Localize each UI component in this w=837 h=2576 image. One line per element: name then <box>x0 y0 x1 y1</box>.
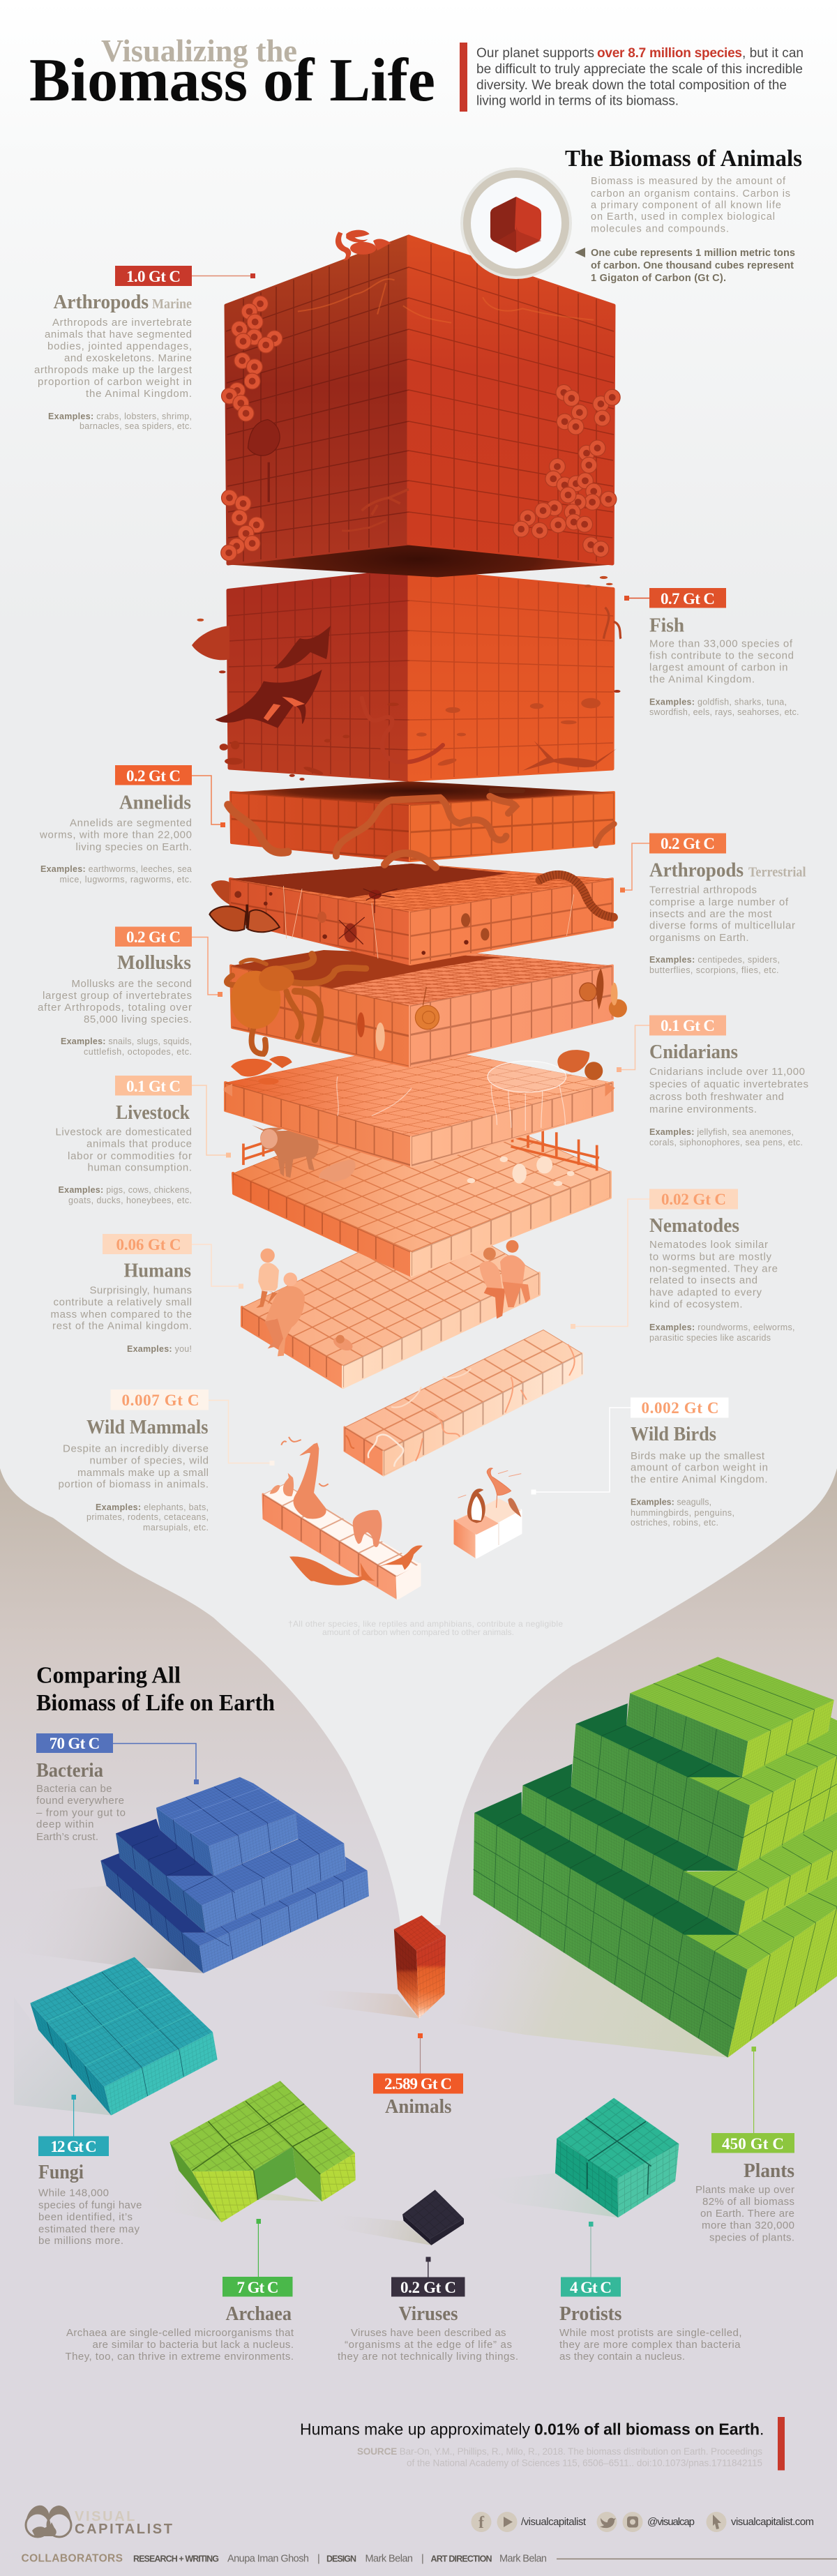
label: humans: contribute a relatively small <box>53 1296 192 1309</box>
label: arthropods marine: 1.0 Gt C <box>126 268 181 285</box>
label: arthropods terrestrial <box>620 833 806 975</box>
label: arthropods marine: animals that have segmented <box>45 329 192 340</box>
label: fish <box>624 588 799 717</box>
label: arthropods marine: arthropods make up the largest <box>34 364 193 376</box>
label: nematodes: 0.02 Gt C <box>661 1191 726 1208</box>
label: wild birds: ostriches, robins, etc. <box>631 1518 718 1528</box>
credits line: Mark Belan <box>499 2553 547 2564</box>
icon: farm animals <box>243 1125 599 1186</box>
label: arthropods marine: Arthropods are invertebrate <box>52 317 192 329</box>
label: annelids: Examples: earthworms, leeches, sea <box>40 864 192 874</box>
title: Biomass of Life <box>29 47 435 114</box>
stack: fish cube <box>192 570 621 781</box>
credits line: Anupa Iman Ghosh <box>227 2553 309 2564</box>
label: nematodes: Nematodes <box>649 1214 739 1237</box>
label: bacteria: found everywhere <box>36 1795 124 1807</box>
label: fungi: species of fungi have <box>38 2199 142 2211</box>
icon: people <box>256 1240 530 1356</box>
label: fungi: Fungi <box>38 2161 84 2183</box>
stack: wild mammals blocks <box>263 1437 423 1599</box>
callout: one cube scale <box>575 248 795 284</box>
label: arthropods terrestrial: 0.2 Gt C <box>661 835 715 852</box>
social links: @visualcap <box>647 2516 695 2528</box>
label: fungi: been identified, it’s <box>38 2211 133 2223</box>
label: fungi <box>38 2095 142 2247</box>
blocks: protists <box>555 2098 679 2217</box>
label: fish: the Animal Kingdom. <box>649 674 755 685</box>
label: plants: Plants <box>744 2160 794 2182</box>
label: humans: Surprisingly, humans <box>89 1285 192 1296</box>
credits line: | <box>421 2553 424 2564</box>
label: fungi: estimated there may <box>38 2224 140 2235</box>
label: plants: 450 Gt C <box>722 2135 784 2153</box>
label: wild birds: hummingbirds, penguins, <box>631 1508 734 1518</box>
label: archaea: Archaea <box>226 2303 292 2325</box>
label: cnidarians: Cnidarians <box>649 1041 738 1063</box>
callout: humans share of biomass: 0.01% of all biomass on Earth <box>534 2420 760 2439</box>
label: nematodes: related to insects and <box>649 1274 757 1286</box>
plants second tier <box>571 1703 837 1871</box>
label: arthropods terrestrial: comprise a large number of <box>649 896 789 908</box>
label: cnidarians: Examples: jellyfish, sea anemones, <box>649 1127 794 1137</box>
blocks: animals pillar <box>394 1915 446 2019</box>
label: arthropods terrestrial: Terrestrial <box>748 865 806 880</box>
label: fungi: be millions more. <box>38 2235 123 2247</box>
label: livestock: goats, ducks, honeybees, etc. <box>68 1196 192 1205</box>
text block: biomass definition: on Earth, used in complex biological <box>591 211 775 223</box>
label: archaea: are similar to bacteria but lack a nucleus. <box>92 2339 294 2351</box>
label: fish: fish contribute to the second <box>649 650 794 661</box>
label: viruses <box>338 2257 518 2363</box>
footnote: amount of carbon when compared to other animals. <box>322 1627 514 1637</box>
label: arthropods marine: Marine <box>152 296 192 312</box>
plants third tier <box>522 1764 837 1935</box>
label: bacteria: Bacteria <box>36 1759 103 1782</box>
callout: one cube scale: of carbon. One thousand cubes represent <box>591 260 794 271</box>
icon: worms <box>228 790 614 868</box>
credits line: ART DIRECTION <box>431 2554 492 2564</box>
stack: humans blocks <box>242 1214 539 1387</box>
label: archaea: 7 Gt C <box>237 2279 279 2296</box>
label: wild mammals: 0.007 Gt C <box>121 1392 199 1409</box>
icon: insects <box>209 875 614 958</box>
label: viruses: Viruses have been described as <box>351 2327 506 2339</box>
callout: humans share of biomass: Humans make up approximately <box>300 2420 530 2439</box>
label: arthropods marine: Arthropods <box>53 291 149 313</box>
label: bacteria: Bacteria can be <box>36 1783 112 1795</box>
label: mollusks: largest group of invertebrates <box>43 990 192 1002</box>
intro text: over 8.7 million species <box>597 46 742 61</box>
fungi block <box>30 1957 218 2116</box>
social links <box>472 2512 814 2532</box>
label: bacteria: – from your gut to <box>36 1807 126 1819</box>
label: fish: More than 33,000 species of <box>649 638 793 650</box>
icon: octopus and snails <box>227 954 627 1054</box>
label: annelids: Annelids are segmented <box>70 818 192 829</box>
label: humans: 0.06 Gt C <box>116 1236 181 1253</box>
label: plants: on Earth. There are <box>700 2208 794 2220</box>
callout: one cube scale: 1 Gigaton of Carbon (Gt C). <box>591 273 726 284</box>
label: arthropods marine: proportion of carbon weight in <box>38 376 192 388</box>
heading: comparing all biomass <box>36 1663 275 1716</box>
credits line: | <box>317 2553 320 2564</box>
credits line <box>21 2553 837 2564</box>
label: arthropods terrestrial: diverse forms of multicellular <box>649 919 795 932</box>
blocks: viruses <box>402 2190 464 2245</box>
intro text: Our planet supports <box>476 46 594 61</box>
label: bacteria <box>36 1733 199 1843</box>
icon: instagram <box>622 2512 643 2532</box>
label: protists: they are more complex than bacteria <box>559 2339 741 2351</box>
label: humans: mass when compared to the <box>50 1309 192 1320</box>
intro text <box>460 43 804 112</box>
label: livestock: 0.1 Gt C <box>126 1078 181 1095</box>
label: archaea: Archaea are single-celled microorganisms that <box>66 2327 294 2339</box>
label: animals: Animals <box>385 2095 452 2118</box>
label: mollusks: 0.2 Gt C <box>126 928 181 946</box>
label: wild mammals: mammals make up a small <box>77 1467 209 1479</box>
text block: biomass definition <box>591 176 790 234</box>
bacteria base tier <box>100 1853 369 1973</box>
label: wild mammals: number of species, wild <box>89 1455 209 1466</box>
stack: livestock blocks <box>233 1094 610 1276</box>
social links: visualcapitalist.com <box>731 2516 814 2528</box>
credits line: DESIGN <box>326 2554 356 2564</box>
label: nematodes: have adapted to every <box>649 1286 762 1299</box>
label: plants <box>695 2047 794 2243</box>
label: wild birds: Wild Birds <box>631 1423 716 1445</box>
social links: /visualcapitalist <box>521 2516 587 2528</box>
label: wild birds: amount of carbon weight in <box>631 1462 768 1473</box>
heading: comparing all biomass: Biomass of Life on Earth <box>36 1690 275 1716</box>
label: fungi: 12 Gt C <box>50 2138 97 2155</box>
text block: biomass definition: a primary component of all known life <box>591 199 781 211</box>
icon: facebook <box>472 2512 491 2532</box>
credits line: RESEARCH + WRITING <box>133 2554 219 2564</box>
label: arthropods marine: the Animal Kingdom. <box>86 388 192 400</box>
label: nematodes: non-segmented. They are <box>649 1263 778 1275</box>
label: plants: Plants make up over <box>695 2184 794 2196</box>
intro text: diversity. We break down the total composition of the <box>476 78 787 93</box>
icon: shark <box>192 626 229 660</box>
stack: wild birds blocks <box>455 1468 521 1558</box>
text block: biomass definition: molecules and compounds. <box>591 223 729 234</box>
label: bacteria: Earth’s crust. <box>36 1831 98 1843</box>
label: annelids: Annelids <box>119 791 191 813</box>
label: wild mammals: marsupials, etc. <box>143 1523 209 1532</box>
icon: twitter <box>597 2512 617 2532</box>
label: fish: Fish <box>649 614 684 636</box>
label: cnidarians <box>617 1016 808 1147</box>
icon: youtube <box>497 2512 518 2532</box>
label: arthropods terrestrial: Terrestrial arthropods <box>649 884 757 896</box>
footnote <box>288 1619 563 1637</box>
footnote: †All other species, like reptiles and amphibians, contribute a negligible <box>288 1619 563 1629</box>
label: bacteria: 70 Gt C <box>50 1735 100 1752</box>
credits line: Mark Belan <box>365 2553 413 2564</box>
label: cnidarians: Cnidarians include over 11,000 <box>649 1066 805 1078</box>
icon: carbon cube in ring <box>460 167 572 279</box>
label: protists: as they contain a nucleus. <box>559 2351 685 2363</box>
fungi shadow <box>14 1997 111 2116</box>
label: humans: Humans <box>124 1260 191 1282</box>
label: viruses: they are not technically living things. <box>338 2351 518 2363</box>
label: cnidarians: species of aquatic invertebrates <box>649 1078 808 1090</box>
plants base tier <box>473 1792 837 2058</box>
logo: visual capitalist <box>26 2506 172 2537</box>
label: wild mammals: Wild Mammals <box>86 1416 208 1438</box>
label: archaea: They, too, can thrive in extreme environments. <box>66 2351 294 2363</box>
text block: biomass definition: Biomass is measured by the amount of <box>591 176 786 187</box>
plants top tier <box>626 1657 834 1777</box>
icon: wild mammals <box>270 1437 423 1585</box>
label: mollusks <box>38 926 223 1057</box>
label: mollusks: cuttlefish, octopodes, etc. <box>84 1047 192 1057</box>
label: bacteria: deep within <box>36 1818 93 1830</box>
label: archaea <box>66 2219 294 2363</box>
label: arthropods marine: Examples: crabs, lobsters, shrimp, <box>48 412 192 421</box>
label: annelids: 0.2 Gt C <box>126 767 181 785</box>
intro text: living world in terms of its biomass. <box>476 93 679 109</box>
label: annelids: mice, lugworms, ragworms, etc. <box>60 875 192 884</box>
label: animals <box>373 2033 463 2118</box>
label: livestock: animals that produce <box>86 1138 192 1150</box>
callout: humans share of biomass: . <box>760 2420 764 2439</box>
label: nematodes: kind of ecosystem. <box>649 1299 742 1310</box>
label: mollusks: 85,000 living species. <box>84 1014 192 1025</box>
source note <box>357 2446 762 2468</box>
stack: terrestrial arthropods blocks <box>209 864 614 964</box>
label: plants: species of plants. <box>709 2232 794 2243</box>
intro text: be difficult to truly appreciate the scale of this incredible <box>476 62 803 77</box>
stack: marine arthropods cube <box>221 230 620 576</box>
icon: seahorse and small fish <box>197 576 621 639</box>
label: wild birds: the entire Animal Kingdom. <box>631 1473 767 1486</box>
label: fungi: While 148,000 <box>38 2187 109 2199</box>
heading: the biomass of animals: The Biomass of Animals <box>565 146 802 172</box>
label: arthropods terrestrial: Arthropods <box>649 859 744 882</box>
label: protists: Protists <box>559 2303 622 2325</box>
label: livestock: Examples: pigs, cows, chickens, <box>59 1185 192 1195</box>
label: wild mammals <box>59 1389 275 1532</box>
callout: one cube scale: One cube represents 1 million metric tons <box>591 248 795 259</box>
blocks: plants <box>444 1657 837 2058</box>
label: viruses: 0.2 Gt C <box>400 2279 456 2296</box>
label: nematodes: parasitic species like ascarids <box>649 1333 771 1343</box>
label: protists <box>559 2222 742 2363</box>
label: livestock <box>56 1076 231 1205</box>
title: Visualizing the <box>101 33 297 68</box>
stack: mollusks blocks <box>227 947 627 1067</box>
logo: visual capitalist: CAPITALIST <box>75 2522 172 2537</box>
label: fish: Examples: goldfish, sharks, tuna, <box>649 698 787 707</box>
icon: facebook: f <box>478 2514 485 2532</box>
label: plants: 82% of all biomass <box>702 2196 794 2208</box>
label: cnidarians: corals, siphonophores, sea pens, etc. <box>649 1138 803 1147</box>
label: arthropods terrestrial: organisms on Earth. <box>649 932 749 944</box>
callout: humans share of biomass <box>300 2417 785 2471</box>
blocks: archaea <box>169 2081 356 2222</box>
label: fish: swordfish, eels, rays, seahorses, etc. <box>649 707 799 717</box>
icon: jellyfish and corals <box>224 1050 615 1131</box>
icon: sea life <box>216 670 621 781</box>
label: livestock: human consumption. <box>88 1162 192 1173</box>
label: wild birds: Birds make up the smallest <box>631 1450 765 1462</box>
label: protists: 4 Gt C <box>570 2279 612 2296</box>
icon: cursor <box>706 2512 727 2532</box>
label: nematodes: Nematodes look similar <box>649 1239 768 1251</box>
label: plants: more than 320,000 <box>702 2220 794 2231</box>
label: fish: 0.7 Gt C <box>661 590 715 608</box>
label: humans: Examples: you! <box>127 1344 192 1354</box>
label: nematodes <box>571 1189 795 1343</box>
heading: comparing all biomass: Comparing All <box>36 1663 181 1688</box>
label: livestock: Livestock <box>116 1101 190 1124</box>
label: mollusks: Mollusks are the second <box>71 978 192 990</box>
label: wild birds: Examples: seagulls, <box>631 1497 711 1507</box>
label: animals: 2.589 Gt C <box>384 2075 452 2093</box>
text block: biomass definition: carbon an organism contains. Carbon is <box>591 188 790 199</box>
shape shadows <box>128 1989 618 2245</box>
bacteria shadow <box>14 1885 204 1973</box>
credits line: COLLABORATORS <box>21 2553 123 2564</box>
intro text: , but it can <box>742 46 804 61</box>
label: arthropods terrestrial: butterflies, scorpions, flies, etc. <box>649 965 778 975</box>
label: arthropods terrestrial: Examples: centipedes, spiders, <box>649 955 780 965</box>
blocks: bacteria and fungi <box>14 1777 369 2116</box>
source note: of the National Academy of Sciences 115, 6506–6511.. doi:10.1073/pnas.1711842115 <box>407 2458 762 2468</box>
bacteria middle tier <box>116 1814 346 1933</box>
label: humans <box>50 1234 243 1354</box>
label: cnidarians: 0.1 Gt C <box>661 1017 715 1034</box>
label: mollusks: Examples: snails, slugs, squids, <box>61 1037 192 1046</box>
icon: birds <box>458 1468 521 1523</box>
stack: cnidarians blocks <box>224 1044 615 1166</box>
label: arthropods marine: and exoskeletons. Marine <box>64 352 192 364</box>
label: wild birds: 0.002 Gt C <box>642 1399 718 1417</box>
blocks: remaining biomass shapes <box>128 1915 679 2245</box>
label: livestock: labor or commodities for <box>68 1150 192 1162</box>
label: annelids: living species on Earth. <box>75 841 192 853</box>
label: wild mammals: primates, rodents, cetaceans, <box>86 1512 209 1522</box>
label: arthropods terrestrial: insects and are the most <box>649 908 772 920</box>
label: annelids: worms, with more than 22,000 <box>39 829 192 841</box>
label: mollusks: Mollusks <box>117 951 191 974</box>
label: wild birds <box>531 1398 768 1528</box>
label: nematodes: Examples: roundworms, eelworms, <box>649 1323 795 1332</box>
plants shadow <box>444 1867 728 2058</box>
label: fish: largest amount of carbon in <box>649 661 788 674</box>
icon: nematode worms <box>346 1344 575 1467</box>
icon: barnacles, crab and shrimp <box>221 230 620 561</box>
label: arthropods marine: bodies, jointed appendages, <box>47 340 192 352</box>
label: livestock: Livestock are domesticated <box>56 1126 192 1138</box>
source note: SOURCE Bar-On, Y.M., Phillips, R., Milo, R., 2018. The biomass distribution on Earth. Proceedings <box>357 2446 762 2457</box>
label: wild mammals: portion of biomass in animals. <box>59 1479 209 1490</box>
bacteria top tier <box>156 1777 344 1876</box>
label: cnidarians: across both freshwater and <box>649 1091 784 1103</box>
label: cnidarians: marine environments. <box>649 1104 757 1115</box>
label: viruses: “organisms at the edge of life” as <box>345 2339 512 2351</box>
label: wild mammals: Despite an incredibly diverse <box>63 1443 209 1455</box>
stack: nematodes blocks <box>345 1330 582 1475</box>
logo: visual capitalist: VISUAL <box>75 2509 135 2524</box>
label: annelids <box>39 765 225 884</box>
label: viruses: Viruses <box>399 2303 458 2325</box>
stack: annelids blocks <box>228 781 614 868</box>
icon: upper manta ray <box>273 626 331 668</box>
label: nematodes: to worms but are mostly <box>649 1251 771 1263</box>
label: arthropods marine: barnacles, sea spiders, etc. <box>80 421 192 431</box>
label: protists: While most protists are single-celled, <box>559 2327 742 2339</box>
label: wild mammals: Examples: elephants, bats, <box>96 1502 209 1512</box>
label: mollusks: after Arthropods, totaling over <box>38 1002 192 1014</box>
label: arthropods marine <box>34 266 255 431</box>
label: humans: rest of the Animal kingdom. <box>52 1320 192 1332</box>
